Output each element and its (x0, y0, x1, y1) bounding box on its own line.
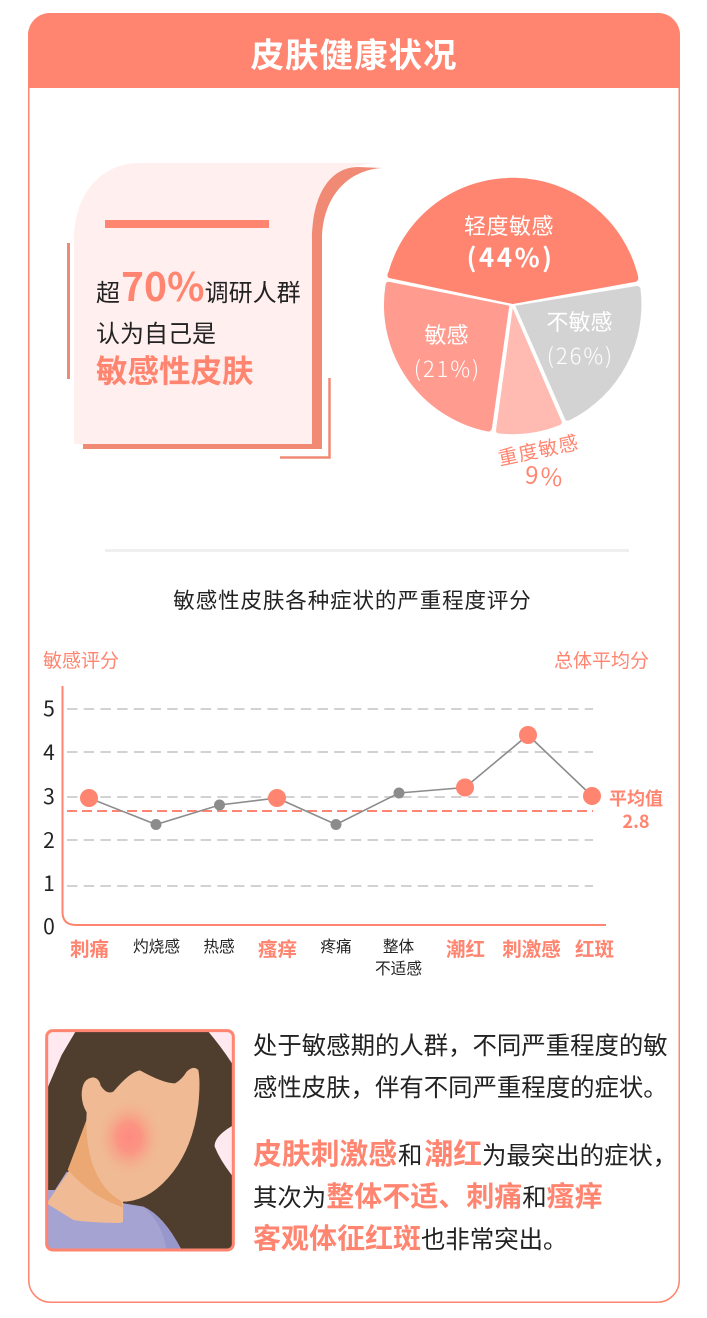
average value label: 平均值 (609, 785, 663, 811)
callout line 1: 超70%调研人群 (96, 257, 301, 313)
header banner (28, 13, 680, 88)
paper sheet (74, 163, 372, 444)
paragraph 2 line 1: 皮肤刺激感和潮红为最突出的症状， (253, 1132, 677, 1173)
label 敏感: 敏感 (424, 318, 469, 350)
x axis labels: 整体 (383, 934, 414, 957)
x axis labels: 热感 (203, 934, 235, 957)
label 9%: 9% (524, 455, 566, 494)
left accent line (67, 243, 70, 379)
pie chart (384, 178, 641, 494)
y tick labels: 1 (43, 868, 55, 898)
y axis title: 敏感评分 (43, 646, 119, 673)
portrait illustration (46, 1030, 237, 1252)
x axis labels (70, 933, 614, 979)
x axis labels: 瘙痒 (258, 933, 297, 962)
axes (62, 686, 606, 925)
label 轻度敏感: 轻度敏感 (464, 209, 554, 241)
title: 皮肤健康状况 (250, 28, 458, 77)
paragraph 2 line 3: 客观体征红斑也非常突出。 (253, 1217, 567, 1257)
label 不敏感: 不敏感 (546, 305, 613, 337)
slice: 轻度敏感 44% (387, 178, 638, 304)
x axis labels: 红斑 (575, 933, 614, 962)
y tick labels (43, 693, 55, 941)
x axis labels: 疼痛 (320, 934, 352, 957)
label 44%: (44%) (467, 238, 554, 275)
corner bracket (280, 378, 330, 458)
x axis labels: 刺激感 (502, 933, 561, 962)
y tick labels: 4 (43, 737, 55, 767)
paper curl shadow (83, 167, 383, 449)
slice: 不敏感 26% (515, 286, 641, 421)
slice: 重度敏感 9% (496, 308, 562, 434)
y tick labels: 2 (43, 825, 55, 855)
label 21%: (21%) (414, 352, 481, 384)
data line (89, 735, 592, 824)
x axis labels: 灼烧感 (133, 934, 180, 957)
y tick labels: 0 (43, 911, 55, 941)
average axis title: 总体平均分 (554, 646, 649, 673)
callout line 2: 认为自己是 (96, 314, 216, 349)
label 26%: (26%) (547, 339, 614, 371)
paragraph 2 line 2: 其次为整体不适、刺痛和瘙痒 (253, 1175, 603, 1215)
panel: 70% callout (67, 163, 383, 458)
data points (80, 726, 601, 830)
accent bar (105, 220, 269, 228)
slice: 敏感 21% (384, 282, 509, 432)
paragraph 1: 处于敏感期的人群，不同严重程度的敏 (253, 1027, 668, 1062)
callout line 3: 敏感性皮肤 (96, 346, 254, 392)
y tick labels: 5 (43, 693, 55, 723)
y tick labels: 3 (43, 781, 55, 811)
x axis labels: 刺痛 (70, 933, 109, 962)
paragraph 1: 感性皮肤，伴有不同严重程度的症状。 (253, 1069, 668, 1104)
average value label: 2.8 (622, 808, 650, 834)
average line (67, 810, 593, 812)
label 重度敏感: 重度敏感 (495, 426, 581, 471)
chart title: 敏感性皮肤各种症状的严重程度评分 (173, 584, 532, 615)
line chart (43, 646, 663, 979)
x axis labels: 潮红 (446, 933, 485, 962)
x axis labels: 不适感 (375, 956, 422, 979)
description text (253, 1027, 677, 1257)
